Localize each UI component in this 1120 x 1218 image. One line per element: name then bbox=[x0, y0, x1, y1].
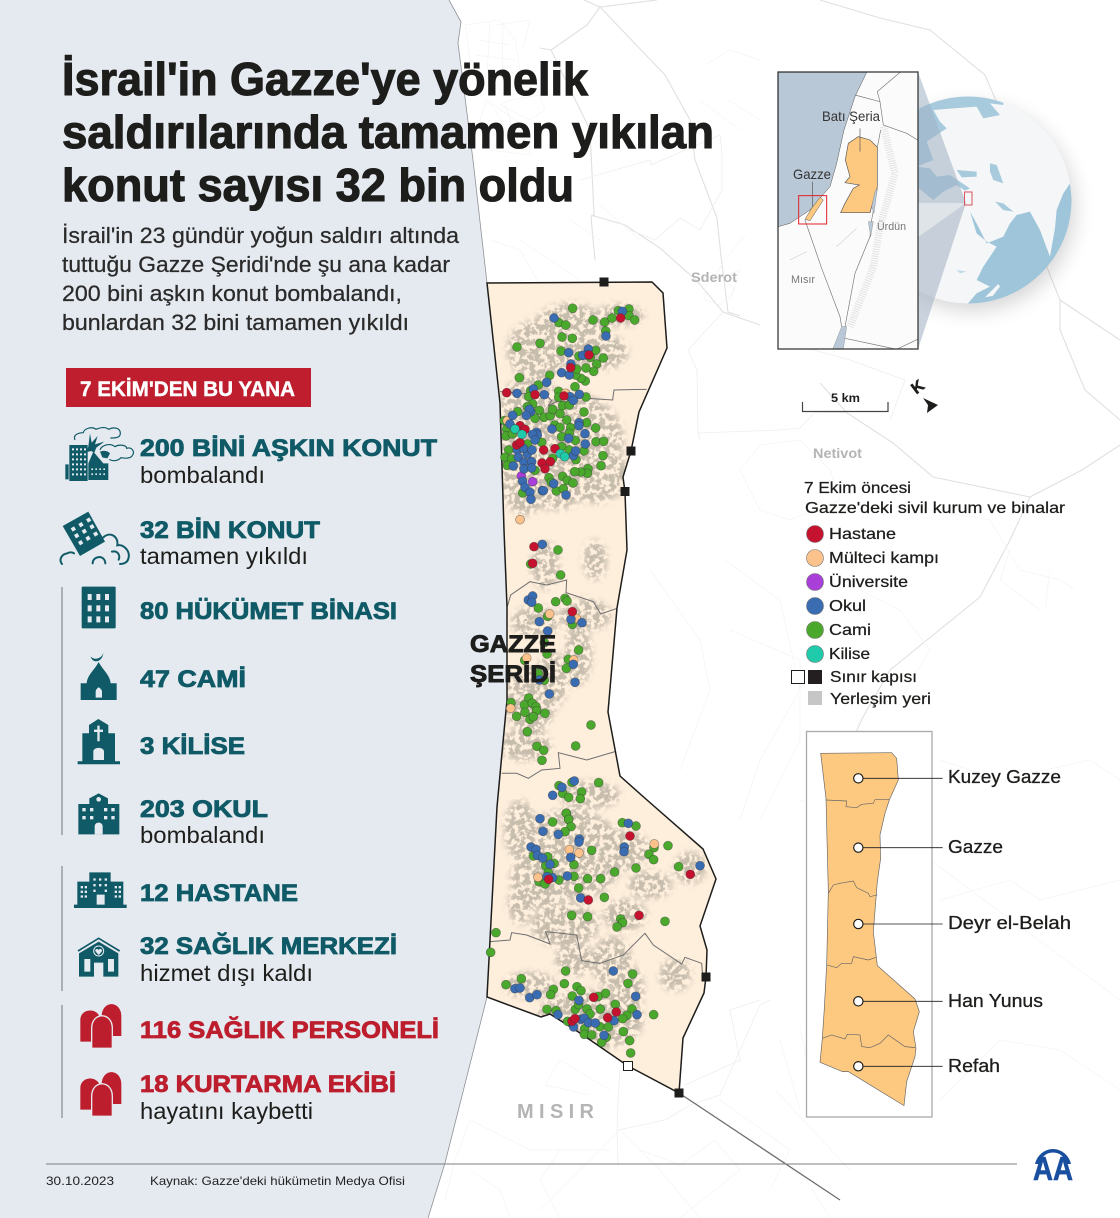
inset locator map bbox=[778, 72, 918, 349]
governorate key map: Gazze bbox=[948, 837, 1003, 857]
stat: health centres: hizmet dışı kaldı bbox=[140, 960, 313, 986]
icon: health house bbox=[78, 938, 120, 977]
border line continuing past Rafah bbox=[679, 1093, 840, 1200]
stat: homes destroyed bbox=[61, 512, 320, 569]
date tag bbox=[66, 368, 311, 407]
legend: Sınır kapısı: Sınır kapısı bbox=[830, 669, 917, 686]
Gaza Strip label bbox=[470, 631, 556, 688]
inset labels: Gazze bbox=[793, 166, 831, 182]
stat: mosques bbox=[81, 653, 246, 700]
stat: hospitals bbox=[74, 872, 298, 908]
legend: Cami bbox=[806, 622, 871, 639]
legend: Kilise: Kilise bbox=[829, 646, 870, 663]
settlements texture bbox=[496, 303, 706, 1050]
icon: mosque bbox=[81, 653, 117, 700]
map place labels bbox=[517, 270, 863, 1123]
title bbox=[62, 53, 714, 211]
left panel background (sea) bbox=[0, 0, 507, 1218]
stat: homes destroyed: tamamen yıkıldı bbox=[140, 543, 308, 569]
inset labels: Ürdün bbox=[877, 221, 906, 233]
stat: government buildings bbox=[82, 587, 397, 628]
map place labels: Sderot bbox=[691, 270, 738, 285]
legend: Cami: Cami bbox=[829, 622, 871, 639]
icon: gravestones bbox=[80, 1004, 121, 1048]
location dots: south bbox=[486, 809, 704, 1057]
legend: Yerleşim yeri: Yerleşim yeri bbox=[830, 691, 931, 708]
stat: health centres bbox=[78, 932, 397, 986]
legend: Gazze'deki sivil kurum ve binalar bbox=[805, 500, 1066, 517]
scale bar bbox=[802, 391, 888, 412]
legend: Mülteci kampı: Mülteci kampı bbox=[829, 550, 939, 567]
title: saldırılarında tamamen yıkılan bbox=[62, 106, 714, 158]
intro paragraph: bunlardan 32 bini tamamen yıkıldı bbox=[62, 310, 409, 335]
stat: health personnel killed: 116 SAĞLIK PERSONELİ bbox=[140, 1016, 439, 1044]
stat: schools: 203 OKUL bbox=[140, 796, 268, 823]
outline bbox=[487, 282, 716, 1093]
intro paragraph: İsrail'in 23 gündür yoğun saldırı altında bbox=[62, 223, 460, 248]
legend: Hastane bbox=[806, 526, 896, 543]
stat: rescue workers killed: 18 KURTARMA EKİBİ bbox=[140, 1071, 396, 1098]
border crossings bbox=[600, 278, 710, 1098]
stat: hospitals: 12 HASTANE bbox=[140, 880, 298, 907]
main map: Gaza Strip bbox=[487, 282, 716, 1093]
governorate key map: Kuzey Gazze bbox=[948, 767, 1061, 787]
legend: Okul bbox=[806, 598, 866, 615]
stat: health centres: 32 SAĞLIK MERKEZİ bbox=[140, 932, 397, 960]
legend: Üniversite: Üniversite bbox=[829, 573, 908, 591]
icon: collapsing building bbox=[61, 512, 129, 564]
stat: rescue workers killed: hayatını kaybetti bbox=[140, 1098, 313, 1124]
date tag: 7 EKİM'DEN BU YANA bbox=[80, 378, 295, 401]
footer bbox=[46, 1164, 1017, 1188]
intro paragraph: tuttuğu Gazze Şeridi'nde şu ana kadar bbox=[62, 252, 450, 277]
north arrow: K bbox=[908, 377, 928, 398]
logo: AA: AA bbox=[1033, 1150, 1073, 1187]
icon: gravestones bbox=[80, 1072, 121, 1116]
intro paragraph: 200 bini aşkın konut bombalandı, bbox=[62, 281, 402, 306]
inset labels: Batı Şeria bbox=[822, 108, 880, 124]
governorate key map: Refah bbox=[948, 1056, 1000, 1076]
legend: 7 Ekim öncesi bbox=[804, 480, 911, 497]
stat: homes bombed bbox=[65, 428, 437, 488]
stat: mosques: 47 CAMİ bbox=[140, 666, 246, 693]
section rules bbox=[61, 587, 63, 1118]
location dots: north bbox=[500, 304, 639, 524]
inset labels: Mısır bbox=[791, 274, 815, 286]
governorate key map: Deyr el-Belah bbox=[948, 913, 1071, 933]
stat: government buildings: 80 HÜKÜMET BİNASI bbox=[140, 598, 397, 625]
stat: homes destroyed: 32 BİN KONUT bbox=[140, 517, 320, 544]
legend: Üniversite bbox=[806, 573, 908, 591]
map place labels: Netivot bbox=[813, 446, 863, 461]
stat: homes bombed: 200 BİNİ AŞKIN KONUT bbox=[140, 435, 437, 462]
title: İsrail'in Gazze'ye yönelik bbox=[62, 53, 588, 105]
globe marker bbox=[964, 192, 972, 205]
legend: Kilise bbox=[806, 646, 870, 663]
inset labels bbox=[791, 108, 906, 286]
icon: school bbox=[78, 793, 119, 834]
stat: churches: 3 KİLİSE bbox=[140, 733, 245, 760]
governorate key map bbox=[806, 732, 1071, 1117]
governorate key map: Han Yunus bbox=[948, 991, 1043, 1011]
globe locator bbox=[918, 96, 1082, 318]
intro paragraph bbox=[62, 223, 460, 335]
governorate dividers bbox=[490, 389, 703, 975]
icon: church bbox=[78, 719, 120, 764]
scale bar: 5 km bbox=[831, 391, 860, 405]
legend: Sınır kapısı bbox=[792, 669, 917, 686]
stat: health personnel killed bbox=[80, 1004, 439, 1048]
stat: schools bbox=[78, 793, 268, 848]
base map: roads and towns bbox=[445, 0, 1120, 1218]
stat: homes bombed: bombalandı bbox=[140, 462, 265, 488]
legend: Okul: Okul bbox=[829, 598, 866, 615]
stat: rescue workers killed bbox=[80, 1071, 396, 1124]
location dots: middle bbox=[506, 540, 603, 824]
title: konut sayısı 32 bin oldu bbox=[62, 159, 574, 211]
north arrow bbox=[908, 377, 938, 413]
Gaza Strip label: ŞERİDİ bbox=[470, 661, 556, 688]
Gaza Strip label: GAZZE bbox=[470, 631, 556, 658]
cone connecting inset to globe bbox=[918, 72, 966, 349]
legend: Hastane: Hastane bbox=[829, 526, 896, 543]
icon: bombed buildings bbox=[65, 428, 133, 481]
map place labels: MISIR bbox=[517, 1101, 595, 1123]
footer: 30.10.2023 bbox=[46, 1174, 114, 1188]
stat: schools: bombalandı bbox=[140, 822, 265, 848]
icon: hospital bbox=[74, 872, 127, 908]
stat: churches bbox=[78, 719, 245, 764]
legend bbox=[792, 480, 1066, 708]
footer: Kaynak: Gazze'deki hükümetin Medya Ofisi bbox=[150, 1174, 405, 1188]
icon: office building bbox=[82, 587, 116, 628]
